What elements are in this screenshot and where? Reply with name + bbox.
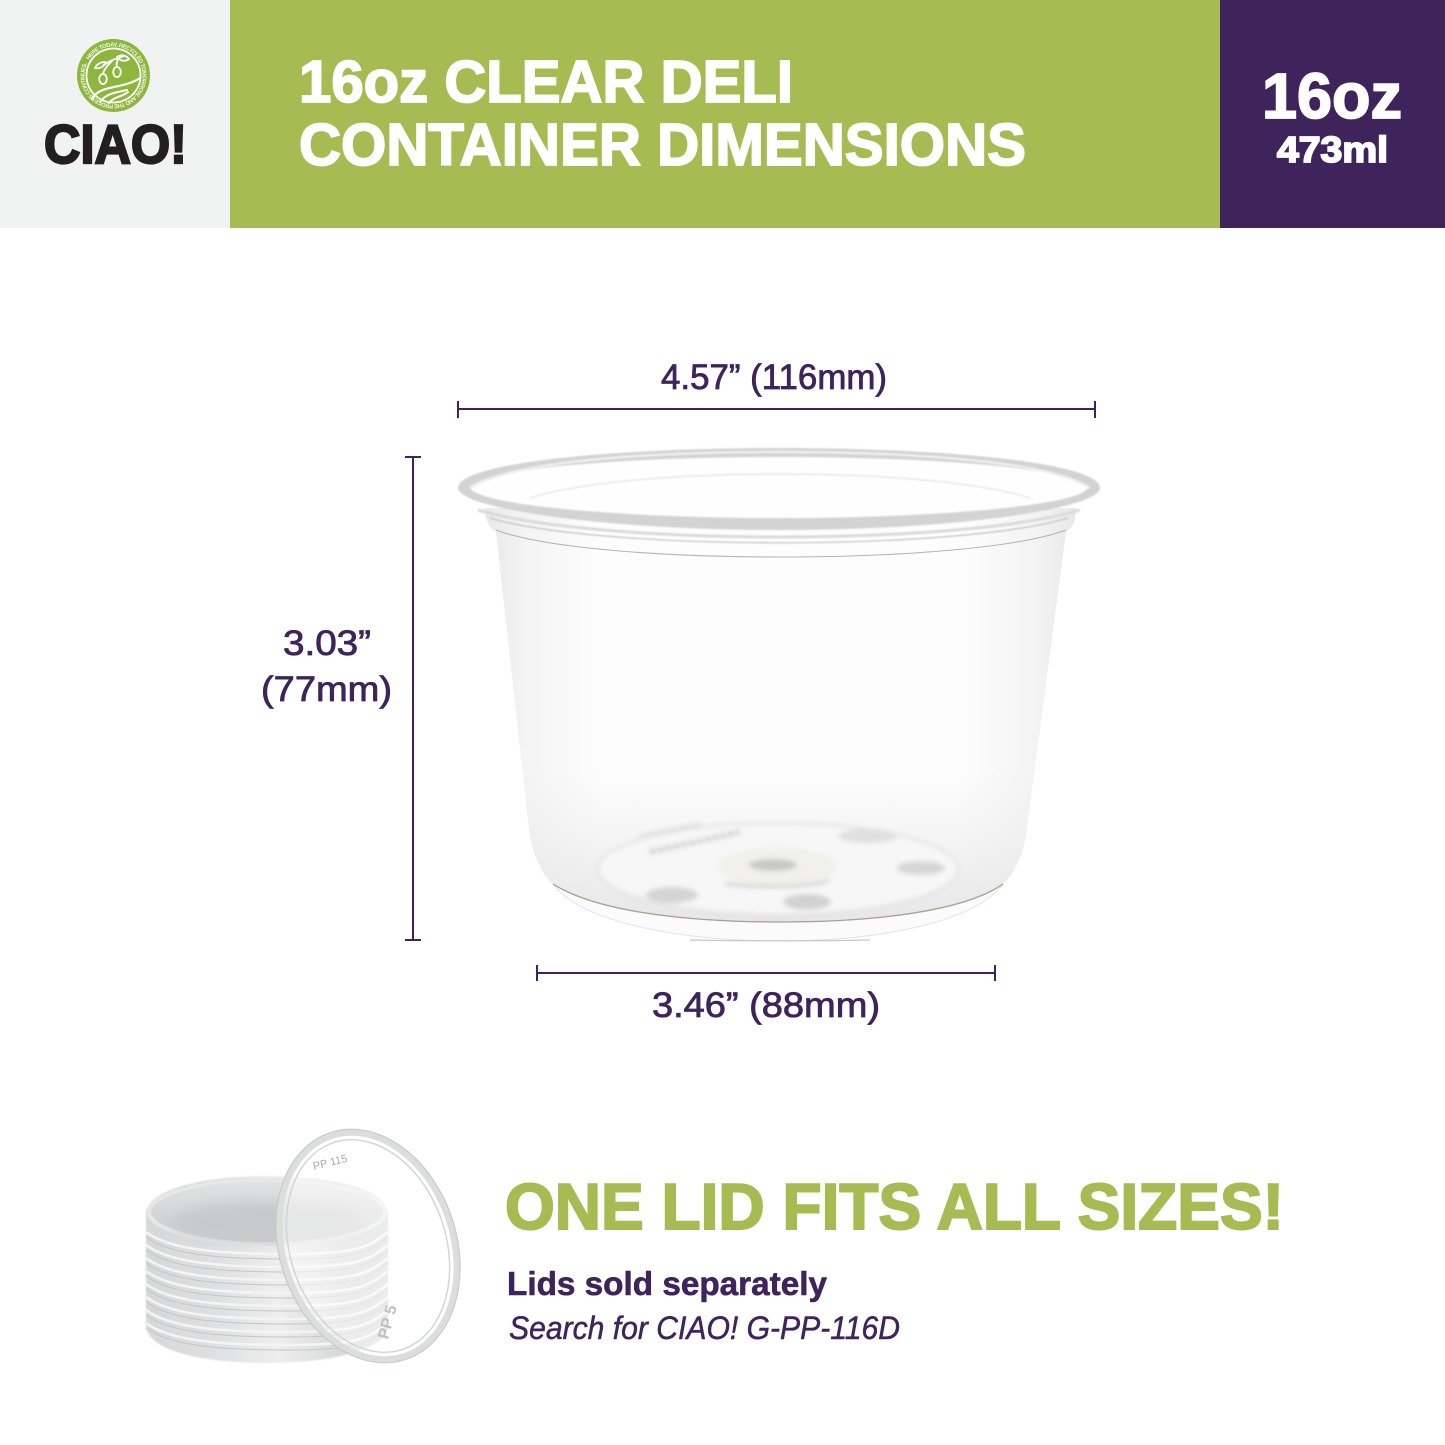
stack of lids: PP 5 <box>375 1303 401 1341</box>
dimension: height <box>261 457 421 940</box>
size badge: 473ml <box>1277 129 1388 170</box>
lid stack top <box>149 1180 385 1244</box>
leaning lid <box>251 1109 485 1383</box>
lid heading: ONE LID FITS ALL SIZES! <box>505 1170 1284 1243</box>
clear deli container <box>458 448 1100 941</box>
panel: header bar <box>0 0 1445 228</box>
lid stack edges <box>146 1232 388 1345</box>
dimension: height: (77mm) <box>261 670 392 709</box>
title: 16oz CLEAR DELI <box>299 49 793 115</box>
lid stack body <box>146 1176 388 1363</box>
dimension: top width: 4.57” (116mm) <box>661 358 887 397</box>
dimension: height: 3.03” <box>283 624 371 663</box>
lid note: Search for CIAO! G-PP-116D <box>509 1310 900 1346</box>
dimension: base width: 3.46” (88mm) <box>652 986 880 1025</box>
title: CONTAINER DIMENSIONS <box>299 112 1026 178</box>
lid embossed marks: PP 115 <box>312 1153 349 1173</box>
lid note: Lids sold separately <box>507 1265 828 1302</box>
container lower rim line <box>496 530 1066 557</box>
dimension: top width <box>458 358 1095 418</box>
container base disc <box>598 823 958 915</box>
size badge: 16oz <box>1262 60 1402 132</box>
container foot <box>553 884 1003 941</box>
logo wordmark: CIAO! <box>44 113 187 175</box>
container lower shading <box>523 770 1034 924</box>
icon: round olive branch badge: HERE TODAY, RECYCLED TOMORROW, AND THE PROCESS CONTINUES. <box>80 42 146 109</box>
size badge <box>1262 60 1402 170</box>
stack of lids <box>146 1105 490 1387</box>
container rim <box>458 448 1100 543</box>
container body <box>484 508 1076 941</box>
lid note <box>507 1265 900 1346</box>
title <box>299 49 1026 178</box>
panel: title background <box>230 0 1220 228</box>
dimension: base width <box>537 965 995 1025</box>
panel: size badge background <box>1220 0 1445 228</box>
panel: logo background <box>0 0 230 228</box>
